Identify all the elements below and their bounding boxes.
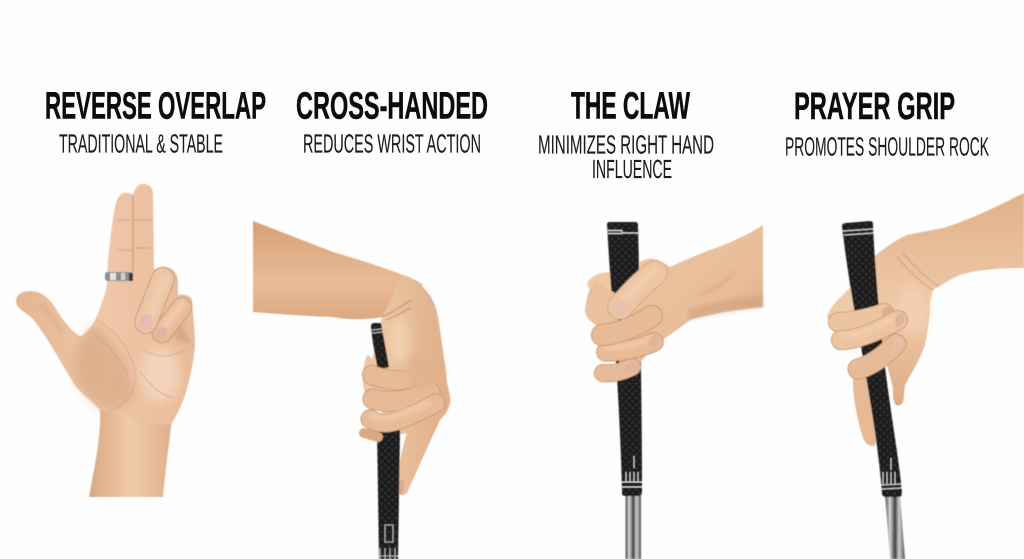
subheading: minimizes right hand influence: MINIMIZES RIGHT HAND (538, 130, 714, 160)
illustration: prayer grip (827, 193, 1024, 559)
palm creases (95, 320, 186, 411)
curled middle finger (162, 304, 182, 333)
heading: the claw: THE CLAW (571, 86, 690, 128)
left fingers behind grip (827, 285, 860, 345)
thumb joint shade (40, 305, 62, 332)
steel shaft (626, 490, 641, 559)
finger three (858, 344, 896, 369)
illustration: claw grip (585, 222, 763, 559)
heading: reverse overlap: REVERSE OVERLAP (45, 86, 266, 128)
grip band lines (843, 229, 902, 489)
grip logo and ticks (379, 525, 398, 559)
finger two (602, 316, 652, 335)
palm and thumb side (372, 275, 450, 495)
knuckle blend into hand (406, 354, 442, 390)
finger nails (646, 332, 662, 350)
thumb (620, 270, 655, 307)
illustration: open hand with ring (16, 184, 195, 497)
index finger knuckle (585, 280, 625, 330)
putter grip (842, 221, 902, 497)
top curled finger behind (363, 355, 385, 395)
silver ring (105, 272, 133, 281)
curled index finger (146, 279, 165, 322)
thumb pad shading (75, 325, 134, 410)
putter grip (607, 222, 642, 496)
subheading: minimizes right hand influence (538, 130, 714, 184)
thumb nail (609, 298, 631, 318)
finger one (838, 313, 884, 322)
finger four (603, 367, 632, 373)
illustration: cross-handed grip (253, 221, 450, 559)
finger shading (132, 195, 134, 272)
forearm tendon shade (700, 272, 735, 294)
finger nails (880, 305, 894, 317)
palm highlight (140, 347, 180, 403)
forearm and palm (872, 193, 1024, 406)
fingernails (138, 312, 154, 332)
subheading: traditional and stable: TRADITIONAL & STABLE (59, 129, 223, 159)
lower arm shade (688, 295, 763, 320)
grip upper part (371, 323, 389, 370)
subheading: reduces wrist action: REDUCES WRIST ACTION (303, 129, 481, 159)
curled finger two (373, 392, 430, 401)
back curled finger shadow (175, 312, 192, 345)
panel: reverse overlap (16, 86, 266, 497)
hand and forearm (617, 225, 763, 372)
panel: the claw (538, 86, 763, 559)
curled finger three (370, 403, 436, 423)
palm highlight (390, 316, 410, 364)
thumb nail (397, 480, 405, 495)
grip band lines (608, 230, 642, 487)
curled finger one (372, 375, 420, 381)
wrist creases (897, 252, 938, 290)
grip band lines (372, 329, 383, 333)
palm shade (896, 284, 928, 336)
finger two (841, 318, 898, 340)
heading: cross-handed: CROSS-HANDED (296, 86, 488, 128)
finger three (606, 338, 654, 352)
panel: cross-handed (253, 86, 488, 559)
hand outline (16, 184, 195, 425)
panel: prayer grip (785, 86, 1024, 559)
steel shaft (885, 494, 905, 559)
forearm (253, 221, 423, 330)
pinky tip (364, 433, 378, 437)
wrist (89, 408, 172, 497)
lower finger behind grip (853, 375, 878, 446)
subheading: minimizes right hand influence: INFLUENCE (592, 154, 672, 184)
skin behind grip (587, 272, 620, 320)
grip lower part (377, 430, 400, 559)
wrist crease (382, 300, 412, 320)
